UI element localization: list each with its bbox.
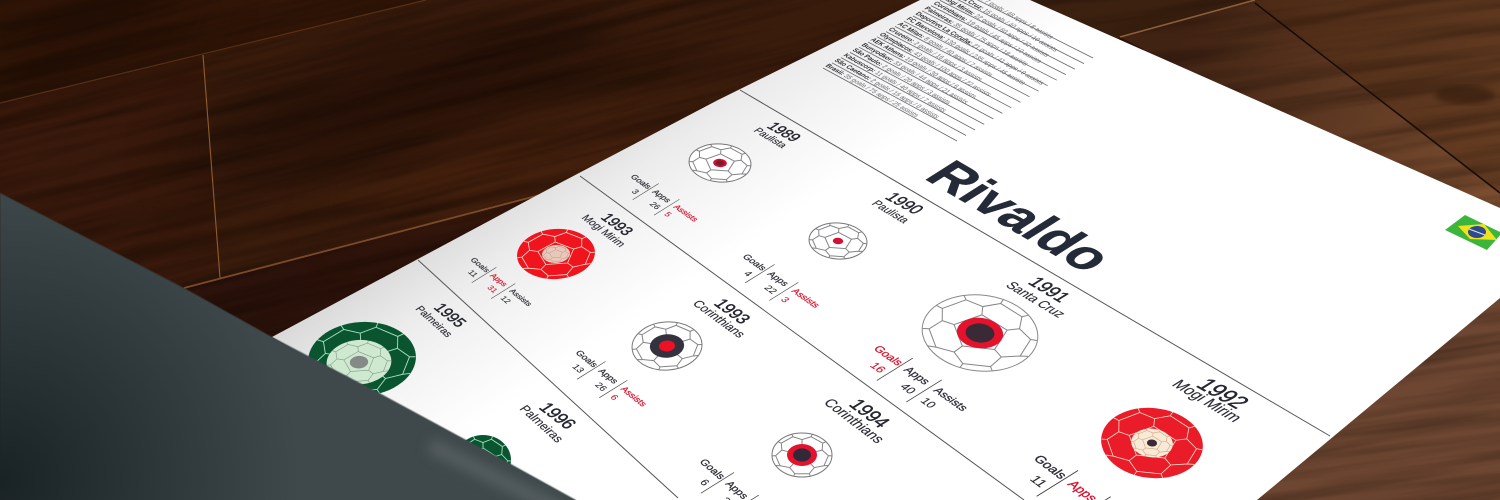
ball [808, 221, 868, 261]
career statistics table: Olympiacos: 43 goals / 100 apps / 22 assists [877, 32, 993, 98]
club: Palmeiras [412, 305, 454, 339]
career statistics table: Corinthians: 19 goals / 45 apps / 10 assists [931, 1, 1044, 65]
stats [678, 454, 789, 500]
divider lines between poster rows [418, 90, 1330, 500]
year: 1994 [844, 396, 894, 432]
year: 1996 [534, 399, 581, 432]
career statistics table: Bunyodkor: 33 goals / 44 apps / 21 assists [859, 42, 970, 105]
club: Paulista [750, 127, 789, 150]
ball [1098, 403, 1206, 483]
club: Mogi Mirim [1167, 378, 1245, 425]
career statistics table: São Paulo: 2 goals / 20 apps / 3 assists [850, 48, 953, 106]
season 1989 Paulista [614, 120, 804, 232]
season 1990 Paulista [724, 190, 928, 320]
ball [455, 435, 511, 485]
career statistics table: Brasil: 35 goals / 75 apps / 25 assists [823, 63, 921, 119]
club: Palmeiras [516, 403, 567, 445]
stats [455, 254, 538, 316]
stats: 4 [741, 270, 755, 279]
stats: 5 [662, 210, 674, 218]
stats: 12 [498, 295, 513, 305]
club: Santa Cruz [1002, 279, 1069, 320]
career statistics table: Cruzeiro: 2 goals / 16 apps / 3 assists [886, 27, 985, 83]
stats: 6 [608, 393, 621, 402]
stats: 40 [897, 382, 919, 396]
club: Corinthians [819, 396, 888, 446]
stats: 6 [697, 478, 712, 488]
foreground dark object covering the poster corner [0, 193, 576, 500]
season 1991 Santa Cruz [851, 274, 1076, 426]
career statistics table [823, 0, 1093, 141]
stats: Assists [789, 287, 822, 309]
ball [772, 433, 832, 477]
stats: 26 [593, 381, 609, 393]
ball [306, 318, 418, 400]
stats [851, 340, 977, 426]
season 1992 Mogi Mirim [1007, 374, 1256, 500]
stats: 31 [485, 284, 500, 295]
stats: Goals [628, 173, 653, 190]
stats: Apps [765, 270, 791, 288]
stats: Goals [1030, 453, 1071, 481]
year: 1992 [1191, 374, 1256, 412]
stats: Assists [618, 385, 650, 408]
stats: 13 [570, 363, 586, 374]
ball [688, 142, 752, 184]
career statistics table: São Caetano: 2 goals / 15 apps / 0 assists [832, 58, 941, 120]
career statistics table: Deportivo La Coruña: 21 goals / 41 apps / 9 assists [913, 11, 1046, 86]
stats: Goals [740, 253, 769, 272]
stats: 11 [466, 269, 480, 279]
year: 1995 [429, 301, 470, 330]
stats [724, 250, 827, 320]
stats [614, 171, 704, 232]
career statistics table: Kabuscorp: 11 goals / 40 apps / 7 assists [841, 53, 949, 114]
club: Paulista [868, 199, 912, 226]
career statistics table: AC Milan: 8 goals / 40 apps / 7 assists [895, 22, 995, 78]
stats: 26 [647, 200, 664, 211]
season 1994 Corinthians [678, 396, 894, 500]
year: 1989 [762, 120, 804, 144]
stats [557, 346, 654, 418]
stats: 10 [917, 396, 939, 411]
title: Rivaldo [913, 153, 1126, 280]
stats: Assists [671, 203, 700, 223]
season 1996 Palmeiras [455, 399, 581, 485]
club: Corinthians [689, 298, 749, 340]
stats: Apps [901, 365, 932, 387]
season 1993 Mogi Mirim [455, 211, 636, 316]
stats: Apps [596, 367, 621, 385]
club: Mogi Mirim [578, 213, 628, 249]
stats: Goals [468, 256, 492, 274]
stats: 11 [1027, 473, 1051, 489]
career statistics table: Palmeiras: 35 goals / 75 apps / 18 assists [922, 6, 1030, 67]
year: 1993 [709, 296, 755, 327]
stats: Apps [650, 188, 673, 204]
year: 1991 [1023, 274, 1076, 305]
season 1995 Palmeiras [306, 301, 470, 400]
stats [1007, 449, 1150, 500]
stats: 3 [629, 188, 642, 196]
ball [918, 289, 1042, 377]
stats: 22 [761, 284, 779, 296]
ball [515, 226, 597, 282]
stats: 16 [867, 361, 888, 375]
season 1993 Corinthians [557, 296, 755, 418]
stats: Goals [696, 457, 728, 481]
year: 1990 [880, 190, 928, 217]
stats: Goals [870, 344, 905, 368]
career statistics table: FC Barcelona: 130 goals / 235 apps / 45 assists [904, 16, 1028, 86]
career statistics table: AEK Athens: 10 goals / 30 apps / 6 assists [868, 37, 979, 100]
year: 1993 [596, 211, 636, 238]
stats: Goals [573, 349, 601, 369]
icon: Brazil flag [1445, 215, 1500, 250]
ball [630, 320, 704, 372]
stats: Assists [930, 386, 970, 413]
stats: 3 [778, 296, 791, 304]
stats: Apps [488, 272, 510, 288]
stats: Assists [507, 287, 534, 308]
